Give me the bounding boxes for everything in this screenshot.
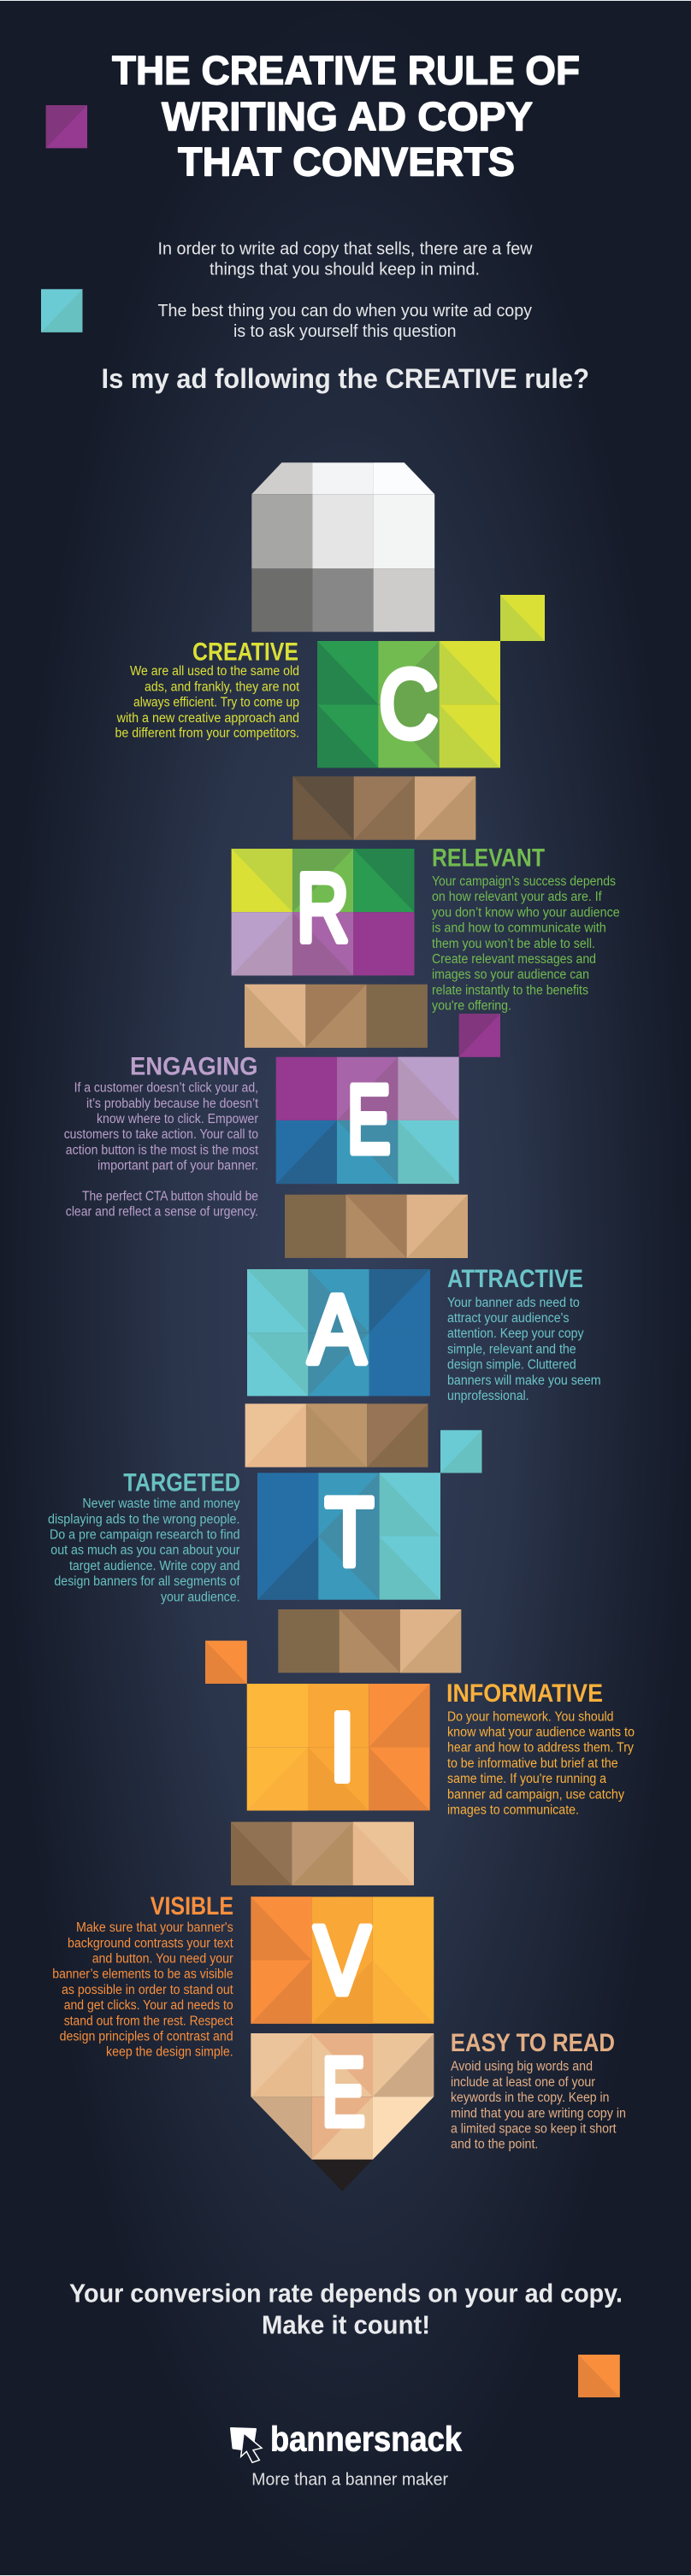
letter I: I bbox=[328, 1693, 356, 1801]
text: targeted: design banners for all segments of bbox=[54, 1574, 240, 1589]
text: targeted: out as much as you can about your bbox=[50, 1544, 239, 1558]
small square: teal bbox=[440, 1430, 481, 1473]
pencil tip bbox=[251, 2033, 434, 2191]
letter R: R bbox=[297, 854, 349, 962]
text: easy to read: EASY TO READ bbox=[451, 2029, 615, 2057]
pencil lead bbox=[312, 2160, 373, 2191]
intro text bbox=[157, 240, 533, 341]
text: relevant: RELEVANT bbox=[432, 844, 545, 872]
text: visible: banner’s elements to be as visible bbox=[52, 1967, 233, 1982]
text: creative: with a new creative approach and bbox=[116, 711, 299, 726]
text: engaging: The perfect CTA button should be bbox=[82, 1189, 258, 1203]
wood block 1 bbox=[292, 776, 475, 840]
text: creative bbox=[115, 638, 300, 741]
icon: cursor bbox=[231, 2428, 262, 2462]
text: informative: same time. If you're running a bbox=[447, 1772, 606, 1786]
text: targeted: target audience. Write copy and bbox=[69, 1559, 239, 1573]
text: visible: background contrasts your text bbox=[68, 1936, 233, 1950]
text: visible: keep the design simple. bbox=[106, 2045, 233, 2060]
wood block 6 bbox=[231, 1822, 414, 1885]
text: creative: CREATIVE bbox=[192, 638, 298, 667]
text: attractive: ATTRACTIVE bbox=[447, 1265, 583, 1293]
text: engaging: clear and reflect a sense of urgency. bbox=[66, 1205, 258, 1219]
text: visible: VISIBLE bbox=[151, 1892, 233, 1920]
text: targeted: Never waste time and money bbox=[82, 1497, 240, 1511]
small square: yellow bbox=[500, 595, 545, 641]
text: informative: know what your audience wants to bbox=[447, 1725, 635, 1740]
text: attractive: attention. Keep your copy bbox=[447, 1326, 584, 1341]
text: creative: be different from your competitors. bbox=[115, 726, 299, 741]
text: engaging bbox=[64, 1052, 259, 1219]
text: engaging: know where to click. Empower bbox=[97, 1112, 258, 1126]
text: attractive bbox=[447, 1265, 601, 1403]
text: relevant bbox=[432, 844, 620, 1014]
intro text: The best thing you can do when you write ad copy bbox=[157, 302, 532, 321]
tagline: More than a banner maker bbox=[251, 2470, 448, 2489]
text: creative: ads, and frankly, they are not bbox=[145, 679, 300, 694]
text: relevant: them you won’t be able to sell. bbox=[432, 937, 595, 951]
text: easy to read: Avoid using big words and bbox=[451, 2060, 593, 2074]
text: easy to read: include at least one of your bbox=[451, 2075, 595, 2090]
decorative square: teal bbox=[41, 289, 82, 332]
text: targeted: your audience. bbox=[161, 1590, 239, 1604]
letter E (easy): E bbox=[322, 2038, 365, 2146]
closing statement: Your conversion rate depends on your ad copy. bbox=[69, 2278, 623, 2308]
question heading: Is my ad following the CREATIVE rule? bbox=[101, 363, 589, 394]
text: relevant: you're offering. bbox=[432, 999, 511, 1014]
text: informative: to be informative but brief at the bbox=[447, 1756, 618, 1771]
letter A: A bbox=[309, 1276, 366, 1384]
text: engaging: important part of your banner. bbox=[97, 1159, 258, 1173]
text: visible: as possible in order to stand out bbox=[62, 1983, 233, 1997]
small square: orange bbox=[205, 1641, 247, 1684]
block: E bbox=[276, 1057, 459, 1184]
text: attractive: Your banner ads need to bbox=[447, 1296, 580, 1310]
text: easy to read bbox=[451, 2029, 626, 2152]
text: relevant: relate instantly to the benefits bbox=[432, 983, 588, 997]
text: relevant: on how relevant your ads are. If bbox=[432, 890, 602, 904]
wood block 4 bbox=[245, 1403, 428, 1467]
text: engaging: If a customer doesn’t click your ad, bbox=[74, 1081, 258, 1096]
text: informative: banner ad campaign, use catchy bbox=[447, 1788, 624, 1802]
text: informative bbox=[446, 1679, 635, 1818]
block: I bbox=[247, 1684, 430, 1810]
text: visible: design principles of contrast and bbox=[60, 2029, 233, 2044]
letter V: V bbox=[315, 1907, 370, 2014]
intro text: In order to write ad copy that sells, there are a few bbox=[157, 240, 533, 259]
text: visible: Make sure that your banner's bbox=[76, 1920, 233, 1935]
closing statement: Make it count! bbox=[262, 2310, 430, 2340]
text: relevant: Create relevant messages and bbox=[432, 952, 596, 967]
text: informative: images to communicate. bbox=[447, 1803, 579, 1818]
title: THAT CONVERTS bbox=[178, 138, 515, 185]
text: informative: Do your homework. You should bbox=[447, 1709, 614, 1724]
text: visible: stand out from the rest. Respect bbox=[64, 2014, 233, 2028]
text: visible: and button. You need your bbox=[92, 1952, 233, 1966]
title: THE CREATIVE RULE OF bbox=[112, 48, 580, 92]
pencil eraser bbox=[251, 462, 434, 632]
decorative square: orange bbox=[578, 2355, 620, 2397]
text: attractive: design simple. Cluttered bbox=[447, 1358, 576, 1373]
text: relevant: is and how to communicate with bbox=[432, 921, 606, 936]
text: visible: and get clicks. Your ad needs to bbox=[64, 1998, 233, 2013]
logo: bannersnack bbox=[231, 2419, 462, 2462]
block: C bbox=[317, 641, 500, 768]
intro text: things that you should keep in mind. bbox=[210, 261, 480, 279]
text: relevant: you don’t know who your audience bbox=[432, 905, 620, 920]
text: visible bbox=[52, 1892, 233, 2060]
block: A bbox=[247, 1269, 430, 1396]
text: engaging: ENGAGING bbox=[130, 1052, 258, 1080]
text: attractive: banners will make you seem bbox=[447, 1373, 601, 1388]
text: creative: We are all used to the same old bbox=[130, 664, 299, 679]
text: relevant: Your campaign’s success depends bbox=[432, 874, 616, 889]
wood block 3 bbox=[285, 1195, 468, 1258]
text: easy to read: mind that you are writing copy in bbox=[451, 2106, 626, 2120]
letter T: T bbox=[325, 1479, 374, 1586]
text: targeted: displaying ads to the wrong people. bbox=[48, 1512, 239, 1526]
text: informative: INFORMATIVE bbox=[446, 1679, 603, 1708]
closing statement bbox=[69, 2278, 623, 2340]
text: attractive: attract your audience's bbox=[447, 1311, 570, 1326]
logo: bannersnack: bannersnack bbox=[270, 2419, 462, 2458]
small square: purple bbox=[459, 1014, 500, 1057]
text: targeted: Do a pre campaign research to find bbox=[50, 1528, 239, 1542]
text: informative: hear and how to address them. Try bbox=[447, 1741, 634, 1756]
text: easy to read: and to the point. bbox=[451, 2137, 538, 2152]
block: V bbox=[251, 1897, 434, 2024]
text: targeted bbox=[48, 1468, 240, 1604]
decorative square: purple bbox=[46, 105, 87, 148]
wood block 5 bbox=[278, 1609, 461, 1673]
letter E: E bbox=[347, 1066, 391, 1173]
text: attractive: unprofessional. bbox=[447, 1389, 529, 1403]
block: T bbox=[257, 1473, 440, 1600]
title bbox=[112, 48, 580, 185]
text: engaging: customers to take action. Your call to bbox=[64, 1127, 258, 1142]
text: attractive: simple, relevant and the bbox=[447, 1342, 576, 1357]
text: easy to read: a limited space so keep it short bbox=[451, 2121, 617, 2137]
text: relevant: images so your audience can bbox=[432, 967, 589, 982]
text: easy to read: keywords in the copy. Keep in bbox=[451, 2091, 609, 2105]
intro text: is to ask yourself this question bbox=[233, 322, 457, 341]
wood block 2 bbox=[245, 985, 428, 1048]
title: WRITING AD COPY bbox=[162, 94, 533, 138]
letter C: C bbox=[379, 650, 438, 757]
text: creative: always efficient. Try to come up bbox=[133, 696, 299, 710]
text: engaging: it’s probably because he doesn’t bbox=[86, 1097, 259, 1111]
text: engaging: action button is the most is the most bbox=[66, 1144, 259, 1157]
text: targeted: TARGETED bbox=[123, 1468, 240, 1497]
block: R bbox=[232, 849, 414, 975]
